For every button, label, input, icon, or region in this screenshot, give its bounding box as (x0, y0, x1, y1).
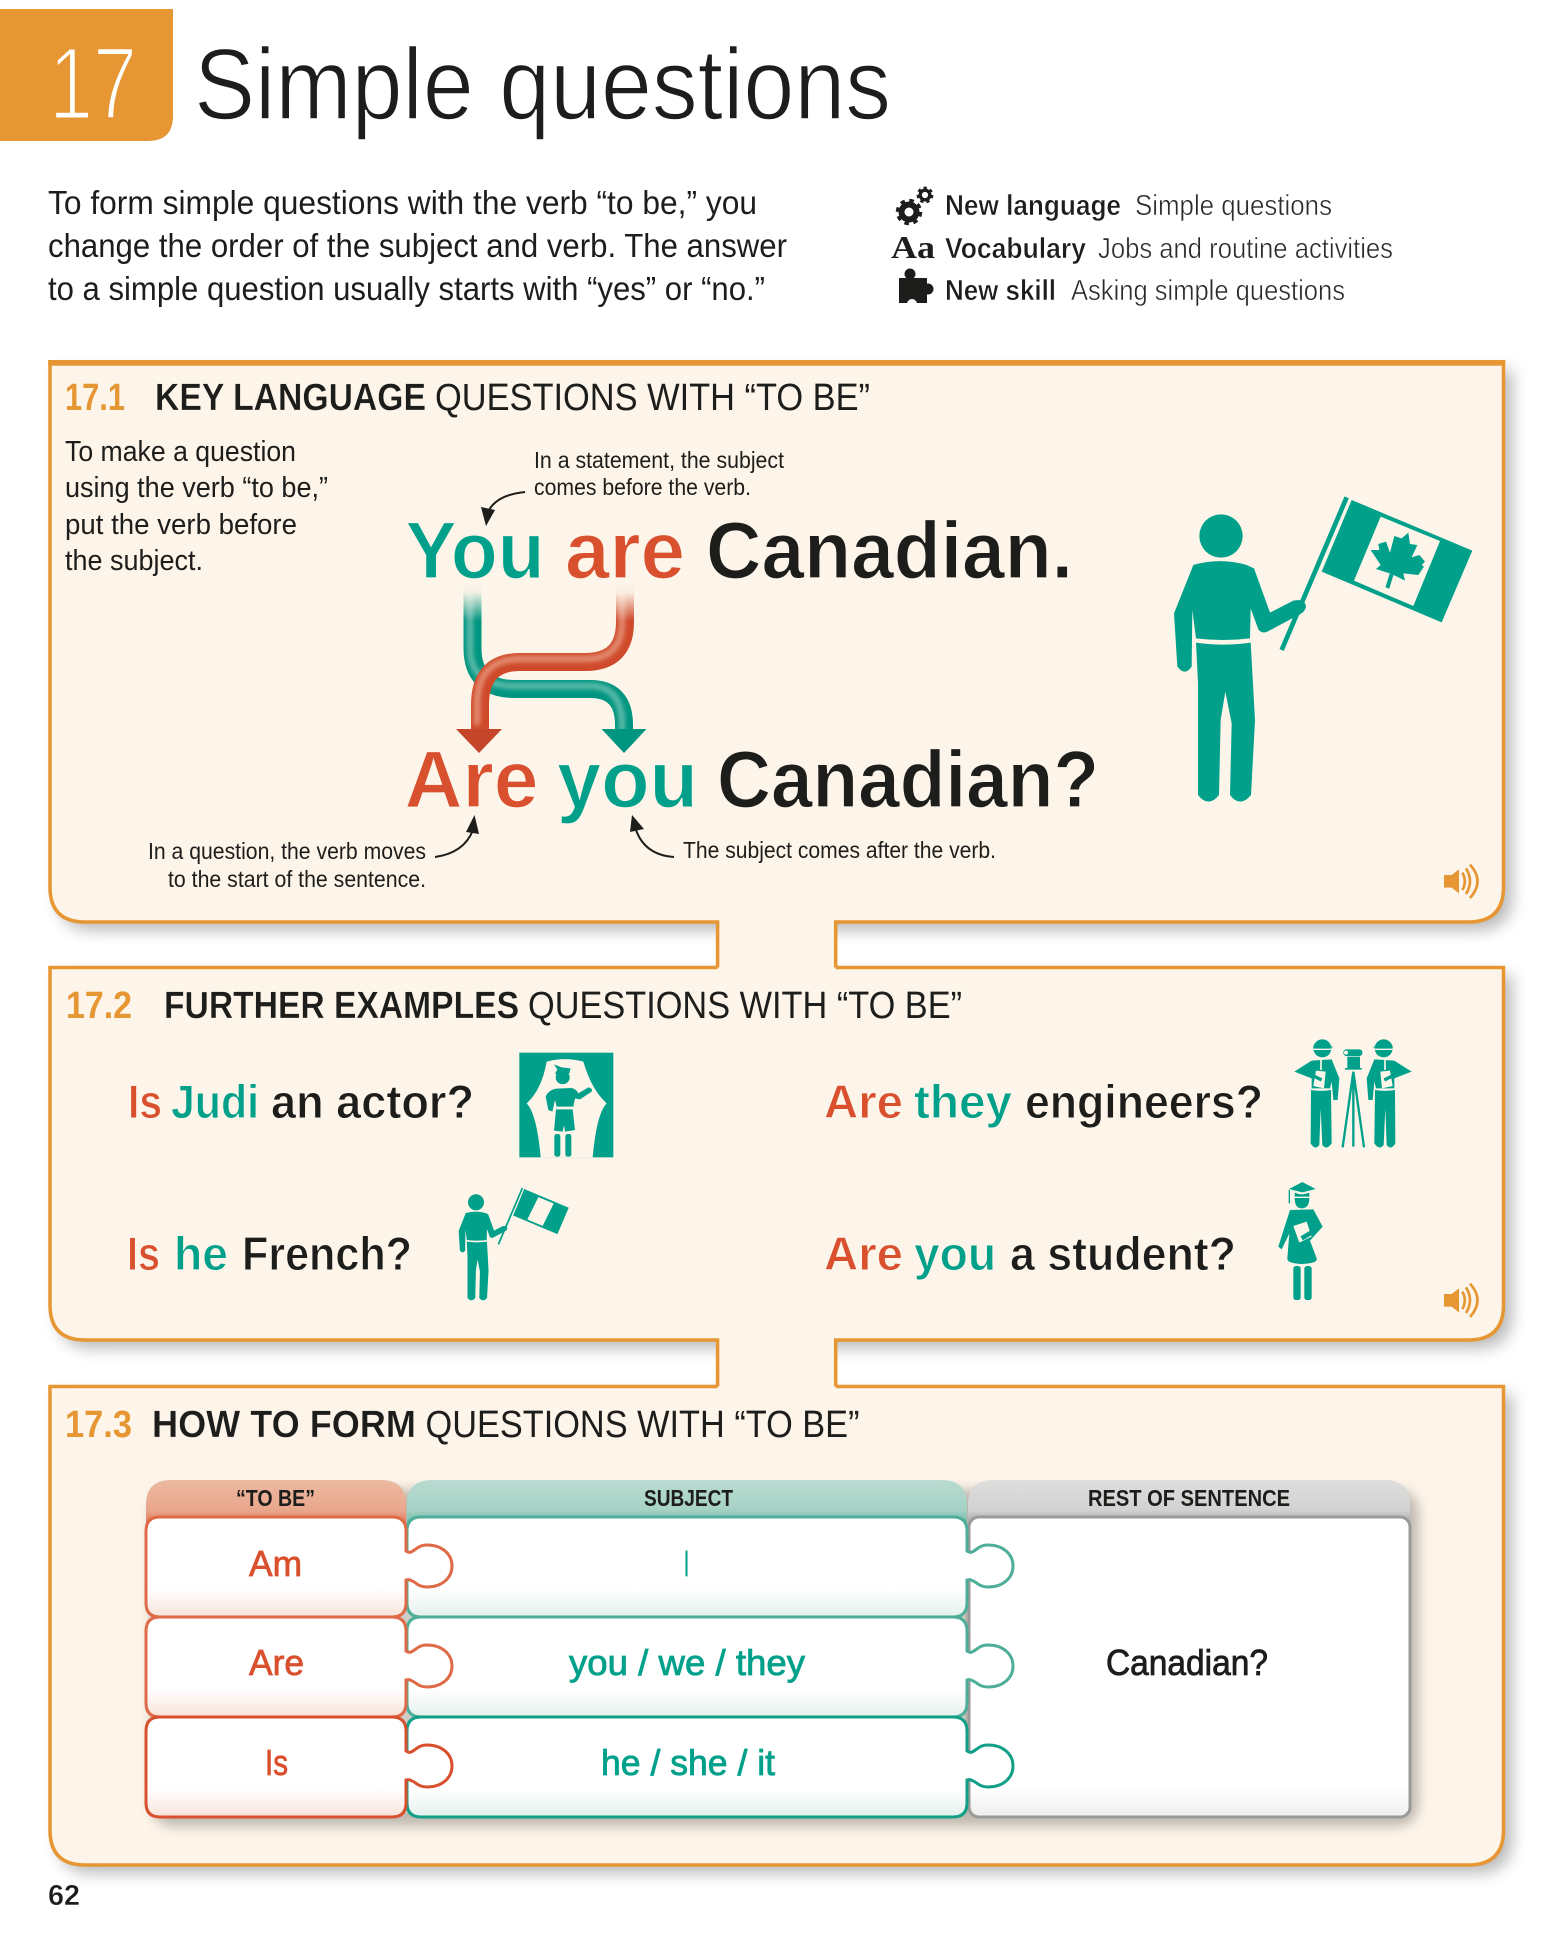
chapter number tab: 17 (49, 26, 137, 141)
example: Are they engineers? (824, 1075, 1263, 1128)
cell: you / we / they (407, 1617, 1013, 1717)
example: Are they engineers?: Are (824, 1075, 903, 1128)
example: Are they engineers?: they (914, 1075, 1012, 1128)
cell: Am (146, 1517, 452, 1617)
new language row: New language (945, 190, 1121, 222)
heading 17.3: 17.3 (65, 1404, 132, 1446)
cell: I: I (684, 1543, 689, 1584)
new skill row: New skill (945, 275, 1056, 307)
example: Are you a student? (824, 1227, 1236, 1280)
arrow: to subject in statement (481, 492, 525, 526)
heading 17.3: QUESTIONS WITH “TO BE” (426, 1404, 860, 1446)
heading 17.3 (65, 1404, 860, 1446)
example: Is he French?: Is (127, 1227, 160, 1280)
example: Is he French?: he (174, 1227, 228, 1280)
cell: Canadian?: Canadian? (1106, 1642, 1268, 1683)
annotation: statement (534, 447, 784, 500)
example: Is Judi an actor? (128, 1075, 474, 1128)
cell: I (407, 1517, 1013, 1617)
intro text block: to a simple question usually starts with “yes” or “no.” (48, 270, 765, 307)
header: rest of sentence (968, 1480, 1410, 1530)
cell: Canadian? (969, 1517, 1410, 1817)
header: to be (146, 1480, 406, 1530)
page number: 62 (48, 1880, 80, 1912)
icon: actor on stage (519, 1053, 613, 1157)
annotation: verb moves: to the start of the sentence. (168, 866, 426, 892)
example: Is Judi an actor?: Judi (171, 1075, 259, 1128)
cell: Are: Are (249, 1642, 304, 1683)
sentence: question: you (557, 735, 698, 825)
cell: he / she / it (407, 1717, 1013, 1817)
cell: Is: Is (265, 1742, 288, 1783)
heading 17.1 (65, 377, 870, 419)
cell: Am: Am (249, 1543, 302, 1584)
connector between panels 17.1 and 17.2 (718, 917, 836, 971)
explanatory text: put the verb before (65, 509, 297, 541)
heading 17.2: QUESTIONS WITH “TO BE” (528, 985, 962, 1027)
annotation: verb moves: In a question, the verb moves (148, 838, 426, 864)
column: rest of sentence (968, 1480, 1410, 1817)
intro text block: To form simple questions with the verb “to be,” you (48, 184, 757, 221)
panel: 17.1 key language (48, 360, 1505, 922)
example: Are you a student?: Are (824, 1227, 903, 1280)
icon: puzzle piece (899, 268, 934, 309)
icon: engineers with surveying instrument (1294, 1039, 1412, 1147)
header: to be: “TO BE” (236, 1485, 315, 1511)
sentence: statement: are (565, 506, 685, 596)
heading 17.3: HOW TO FORM (152, 1404, 416, 1446)
explanatory text: using the verb “to be,” (65, 472, 328, 504)
column: subject (407, 1480, 1013, 1817)
sentence: statement (406, 506, 1073, 596)
icon: Aa: Aa (891, 229, 935, 265)
arrow: to verb in question (435, 815, 479, 857)
cell: you / we / they: you / we / they (569, 1642, 805, 1683)
title: Simple questions (194, 29, 891, 141)
annotation: subject after verb: The subject comes after the verb. (683, 837, 996, 863)
example: Is he French? (127, 1227, 412, 1280)
connector between panels 17.2 and 17.3 (718, 1335, 836, 1390)
table shadow (150, 1490, 1418, 1826)
sentence: question: Canadian? (717, 735, 1099, 825)
chapter number tab (0, 9, 173, 141)
cell: he / she / it: he / she / it (601, 1742, 775, 1783)
sentence: statement: Canadian. (706, 506, 1073, 596)
example: Is Judi an actor?: an actor? (271, 1075, 474, 1128)
intro text block: change the order of the subject and verb. The answer (48, 227, 787, 264)
sentence: statement: You (406, 506, 544, 596)
cell: Is (146, 1717, 452, 1817)
explanatory text: To make a question (65, 436, 296, 468)
example: Are you a student?: a student? (1010, 1227, 1236, 1280)
icon: audio speaker (1444, 1284, 1477, 1317)
annotation: statement: In a statement, the subject (534, 447, 784, 473)
new skill row: Asking simple questions (1071, 275, 1345, 307)
icon: audio speaker (1444, 865, 1477, 898)
icon: person with Canadian flag (1174, 497, 1472, 802)
heading 17.2 (66, 985, 962, 1027)
icon: person with French flag (459, 1188, 569, 1300)
new skill row (945, 275, 1345, 307)
heading 17.2: FURTHER EXAMPLES (164, 985, 519, 1027)
panel: 17.2 further examples (50, 968, 1504, 1340)
heading 17.1: KEY LANGUAGE (155, 377, 426, 419)
heading 17.2: 17.2 (66, 985, 132, 1027)
panel shadows (58, 370, 1512, 1873)
swap arrows (455, 583, 646, 753)
sentence: question: Are (404, 735, 538, 825)
header: rest of sentence: REST OF SENTENCE (1088, 1485, 1290, 1511)
annotation: statement: comes before the verb. (534, 474, 751, 500)
heading 17.1: 17.1 (65, 377, 125, 419)
new language row (945, 190, 1332, 222)
header: subject: SUBJECT (644, 1485, 733, 1511)
example: Is he French?: French? (242, 1227, 412, 1280)
panel: 17.3 how to form (50, 1386, 1504, 1865)
new language row: Simple questions (1135, 190, 1332, 222)
icon: gears (898, 188, 932, 224)
icon: graduate student (1278, 1182, 1323, 1300)
annotation: verb moves (148, 838, 426, 892)
vocabulary row (945, 233, 1393, 265)
intro text block (48, 184, 787, 307)
column: to be (146, 1480, 452, 1817)
learning goals list (891, 188, 1393, 309)
vocabulary row: Vocabulary (945, 233, 1086, 265)
example: Are they engineers?: engineers? (1025, 1075, 1263, 1128)
vocabulary row: Jobs and routine activities (1098, 233, 1393, 265)
cell: Are (146, 1617, 452, 1717)
arrow: to subject in question (630, 815, 674, 857)
explanatory text: the subject. (65, 545, 203, 577)
sentence: question (404, 735, 1099, 825)
heading 17.1: QUESTIONS WITH “TO BE” (435, 377, 870, 419)
explanatory text (65, 436, 328, 577)
example: Are you a student?: you (914, 1227, 996, 1280)
header: subject (407, 1480, 967, 1530)
example: Is Judi an actor?: Is (128, 1075, 162, 1128)
